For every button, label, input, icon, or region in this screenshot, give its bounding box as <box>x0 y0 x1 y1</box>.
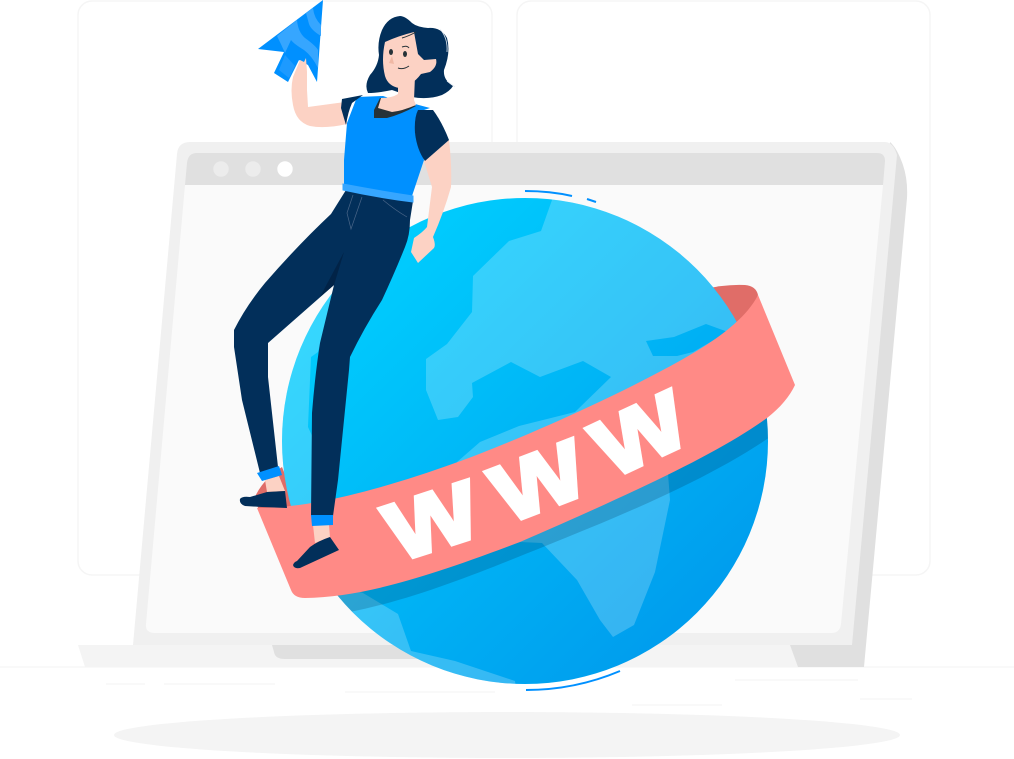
globe <box>282 198 768 684</box>
motion arcs <box>525 191 620 690</box>
right arm <box>411 140 451 263</box>
ground lines <box>0 667 1014 705</box>
laptop screen <box>146 185 883 633</box>
left foot <box>240 466 287 508</box>
laptop base <box>78 645 798 667</box>
waist belt <box>343 184 413 202</box>
face details <box>389 32 416 69</box>
www lettering <box>374 374 702 580</box>
face <box>383 32 436 88</box>
www lettering: W <box>579 374 702 496</box>
ribbon back pieces <box>254 285 758 512</box>
shirt <box>344 96 430 196</box>
www lettering: W <box>479 423 599 542</box>
jeans <box>234 190 413 516</box>
jeans seams <box>347 195 407 229</box>
laptop <box>78 142 907 667</box>
ribbon shadow <box>338 418 768 612</box>
jeans shadow <box>320 252 344 297</box>
laptop bezel <box>133 142 897 645</box>
www lettering: W <box>374 464 491 580</box>
continents <box>282 200 736 684</box>
ribbon <box>257 295 795 598</box>
browser title bar <box>185 153 885 185</box>
laptop side <box>790 142 907 667</box>
hair <box>366 16 453 98</box>
shirt collar <box>374 98 416 118</box>
woman <box>234 0 455 568</box>
neck <box>378 76 416 112</box>
right sleeve <box>415 110 449 161</box>
background cards <box>78 1 930 575</box>
browser dots <box>213 161 293 177</box>
right foot <box>293 515 339 568</box>
hair highlight <box>440 29 455 87</box>
cursor arrow <box>258 0 323 82</box>
ground shadow <box>114 712 900 758</box>
laptop notch <box>272 645 620 659</box>
raised arm <box>292 58 347 127</box>
left sleeve <box>341 95 363 125</box>
